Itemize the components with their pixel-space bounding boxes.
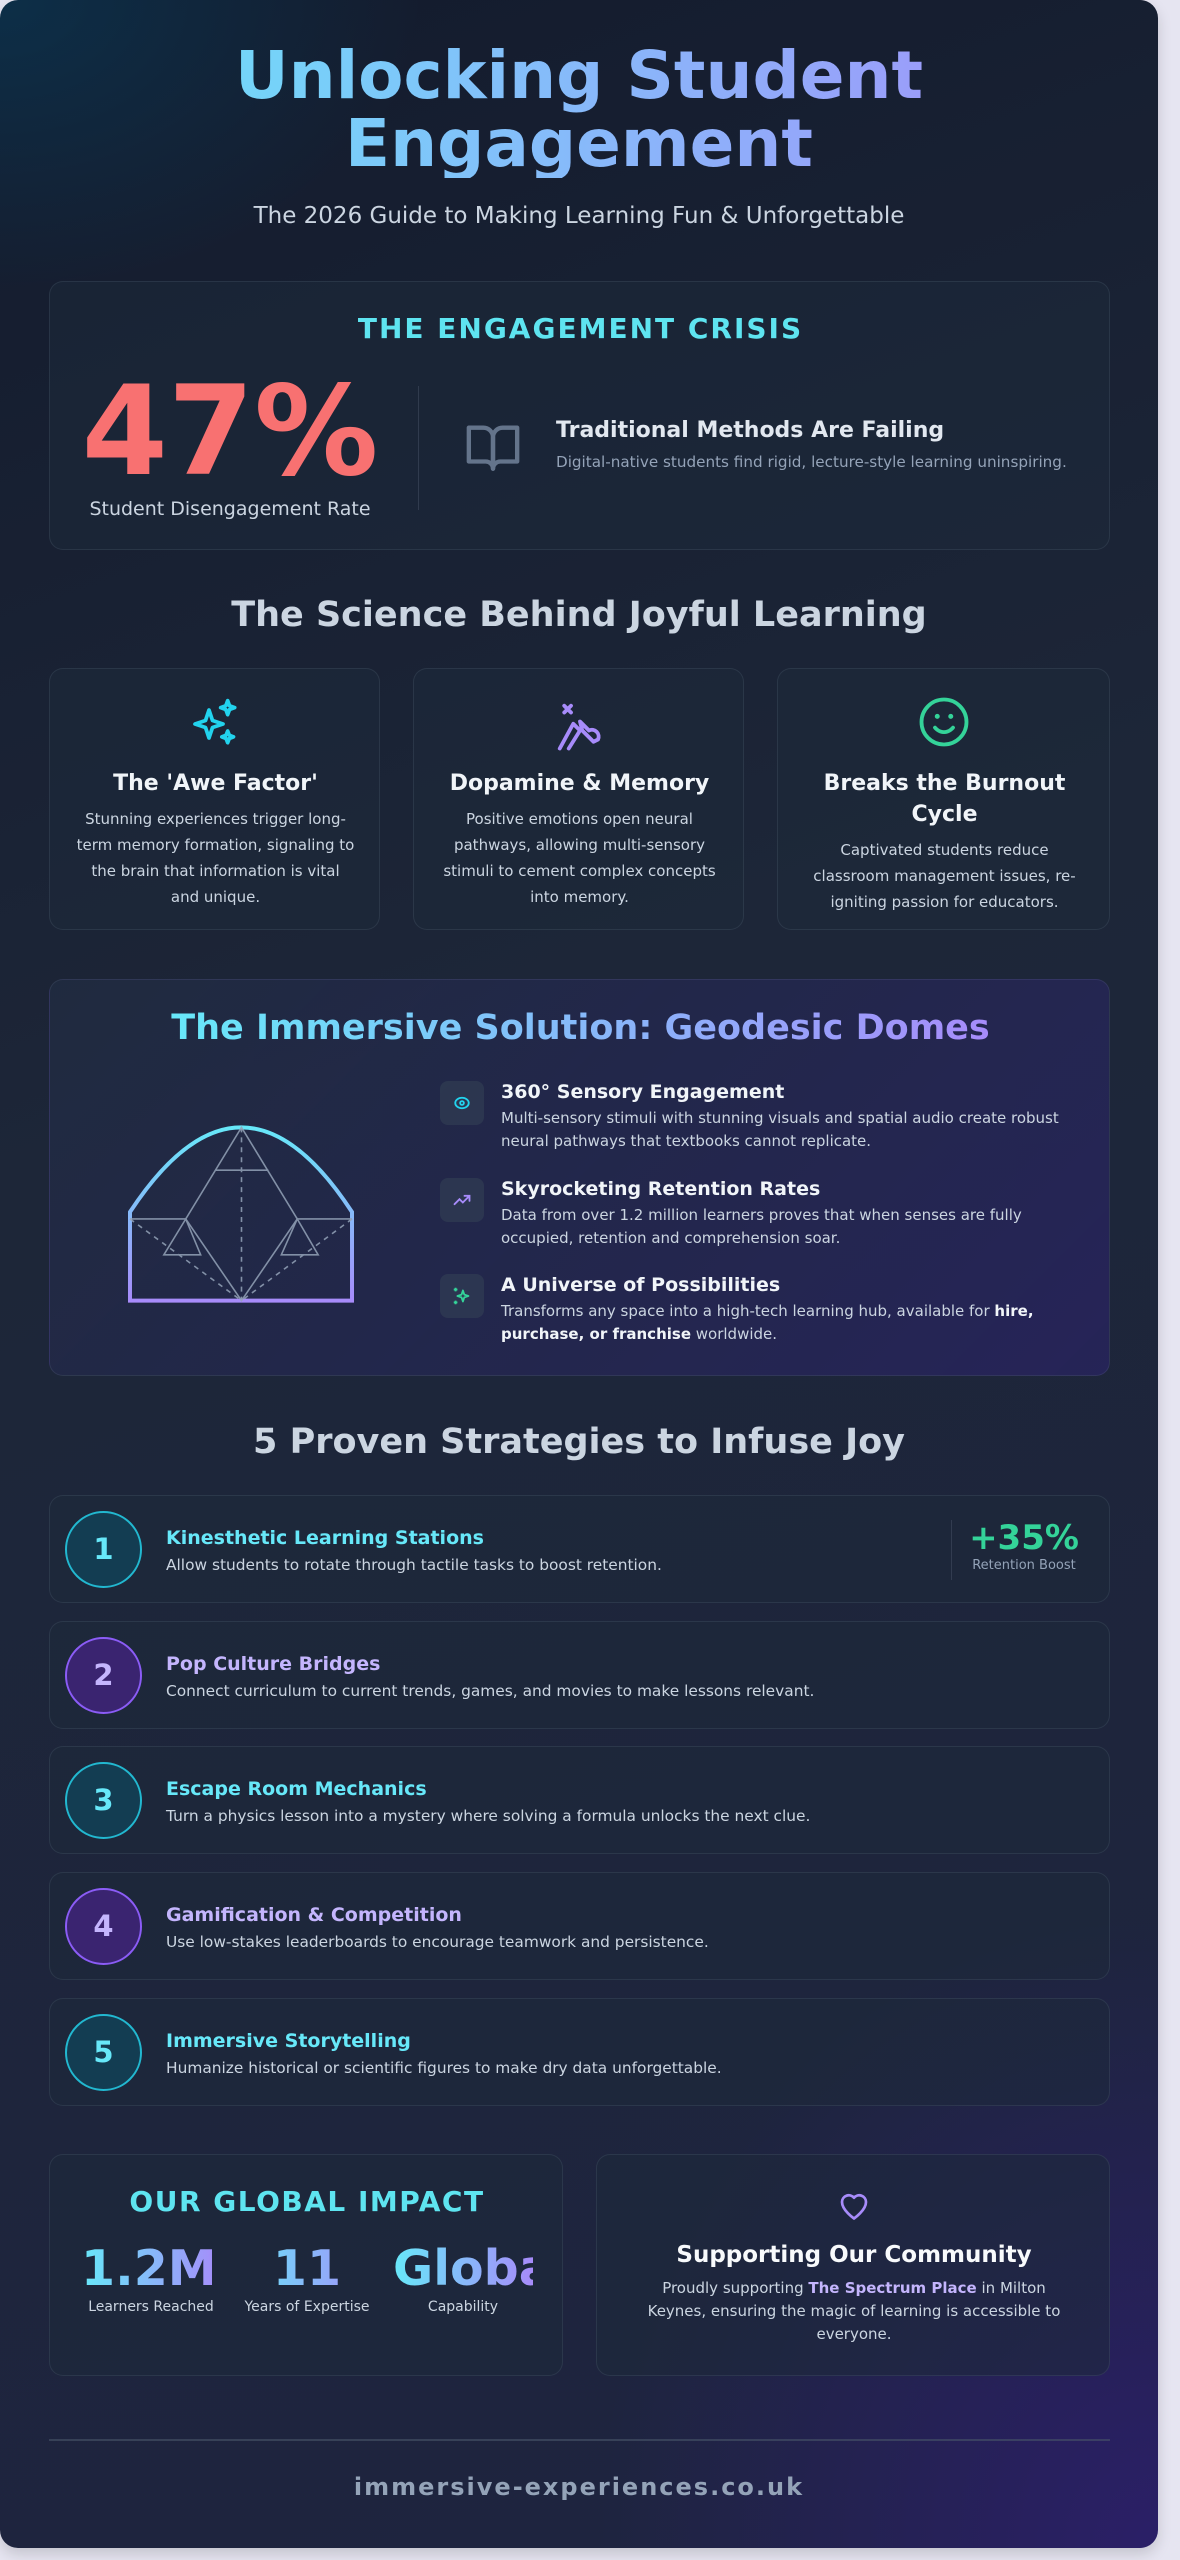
title: Engagement xyxy=(345,105,813,182)
strategy 2: Pop Culture Bridges xyxy=(166,1653,380,1675)
strategy 2: 2 xyxy=(93,1658,114,1692)
panel: immersive solution: Multi-sensory stimuli with stunning visuals and spatial audio create robust neural pathways that textbooks cannot replicate. xyxy=(501,1109,1059,1150)
card text: Positive emotions open neural pathways, allowing multi-sensory stimuli to cement complex concepts into memory. xyxy=(443,810,716,906)
panel: engagement crisis xyxy=(49,281,1110,550)
icon: brain/flask xyxy=(558,704,600,750)
stats xyxy=(81,2240,533,2315)
community title: Supporting Our Community xyxy=(676,2242,1032,2268)
stats: 11 xyxy=(273,2240,341,2297)
heading: strategies: 5 Proven Strategies to Infuse Joy xyxy=(253,1422,905,1462)
item: 360 sensory xyxy=(440,1081,1059,1150)
strategy 5: 5 xyxy=(93,2035,114,2069)
panel: burnout xyxy=(777,668,1110,930)
strategy 3 xyxy=(49,1746,1110,1854)
strategy 4: 4 xyxy=(93,1909,114,1943)
item: universe xyxy=(440,1274,1034,1343)
icon: sparkles xyxy=(193,698,237,745)
panel: immersive solution: Skyrocketing Retention Rates xyxy=(501,1178,820,1200)
stat: +35%: Retention Boost xyxy=(972,1558,1076,1573)
title xyxy=(0,42,1158,178)
dome illustration xyxy=(128,1125,354,1303)
strategy 5: Immersive Storytelling xyxy=(166,2030,411,2052)
icon: eye xyxy=(440,1081,484,1125)
impact heading: OUR GLOBAL IMPACT xyxy=(129,2185,485,2218)
title: Unlocking Student xyxy=(235,37,923,114)
stat: +35%: +35% xyxy=(969,1518,1079,1558)
strategy 4 xyxy=(49,1872,1110,1980)
icon: heart xyxy=(840,2194,868,2220)
card title: Breaks the Burnout Cycle xyxy=(824,771,1065,827)
panel: global impact xyxy=(49,2154,563,2376)
card title: Dopamine & Memory xyxy=(450,771,709,796)
panel: immersive solution: Transforms any space into a high-tech learning hub, available for hire, purchase, or franchise worldwide. xyxy=(501,1302,1034,1343)
item: retention xyxy=(440,1178,1022,1247)
stats: Capability xyxy=(428,2299,498,2315)
strategy 4: Gamification & Competition xyxy=(166,1904,462,1926)
strategy 1: Allow students to rotate through tactile tasks to boost retention. xyxy=(166,1556,662,1574)
footer url: immersive-experiences.co.uk xyxy=(354,2473,804,2501)
panel: awe factor xyxy=(49,668,380,930)
community text: Proudly supporting The Spectrum Place in Milton Keynes, ensuring the magic of learning is accessible to everyone. xyxy=(648,2279,1060,2343)
strategy 2: Connect curriculum to current trends, games, and movies to make lessons relevant. xyxy=(166,1682,814,1700)
solution heading: The Immersive Solution: Geodesic Domes xyxy=(171,1008,990,1048)
strategy 3: Turn a physics lesson into a mystery where solving a formula unlocks the next clue. xyxy=(166,1807,810,1825)
panel: dopamine xyxy=(413,668,744,930)
strategy 4: Use low-stakes leaderboards to encourage teamwork and persistence. xyxy=(166,1933,709,1951)
strategy 3: 3 xyxy=(93,1783,114,1817)
icon: trending xyxy=(440,1178,484,1222)
strategy 5: Humanize historical or scientific figures to make dry data unforgettable. xyxy=(166,2059,722,2077)
stats: Years of Expertise xyxy=(244,2299,370,2315)
stat: 47%: Student Disengagement Rate xyxy=(89,498,371,520)
icon: sparkle xyxy=(440,1274,484,1318)
panel: community xyxy=(596,2154,1110,2376)
panel: immersive solution: 360° Sensory Engagement xyxy=(501,1081,784,1103)
strategy 1: Kinesthetic Learning Stations xyxy=(166,1527,484,1549)
subtitle: The 2026 Guide to Making Learning Fun & Unforgettable xyxy=(254,203,904,229)
text: traditional methods xyxy=(556,418,1067,471)
card text: Stunning experiences trigger long-term memory formation, signaling to the brain that information is vital and unique. xyxy=(77,810,354,906)
strategy 5 xyxy=(49,1998,1110,2106)
icon: book xyxy=(466,426,520,471)
card title: The 'Awe Factor' xyxy=(113,771,318,796)
heading: science: The Science Behind Joyful Learning xyxy=(231,595,927,635)
text: traditional methods: Traditional Methods Are Failing xyxy=(556,418,944,443)
stat: 47%: 47% xyxy=(82,360,378,504)
text: traditional methods: Digital-native students find rigid, lecture-style learning uninspiring. xyxy=(556,453,1067,471)
stats: Learners Reached xyxy=(88,2299,214,2315)
panel: immersive solution xyxy=(49,979,1110,1376)
icon: smile xyxy=(920,698,968,746)
panel: immersive solution: Data from over 1.2 million learners proves that when senses are fully occupied, retention and comprehension soar. xyxy=(501,1206,1022,1247)
crisis heading: THE ENGAGEMENT CRISIS xyxy=(358,312,803,345)
strategy 3: Escape Room Mechanics xyxy=(166,1778,427,1800)
strategy 1 xyxy=(49,1495,1110,1603)
strategy 2 xyxy=(49,1621,1110,1729)
panel: immersive solution: A Universe of Possibilities xyxy=(501,1274,780,1296)
card text: Captivated students reduce classroom management issues, re-igniting passion for educators. xyxy=(813,841,1076,911)
strategy 1: 1 xyxy=(93,1532,114,1566)
